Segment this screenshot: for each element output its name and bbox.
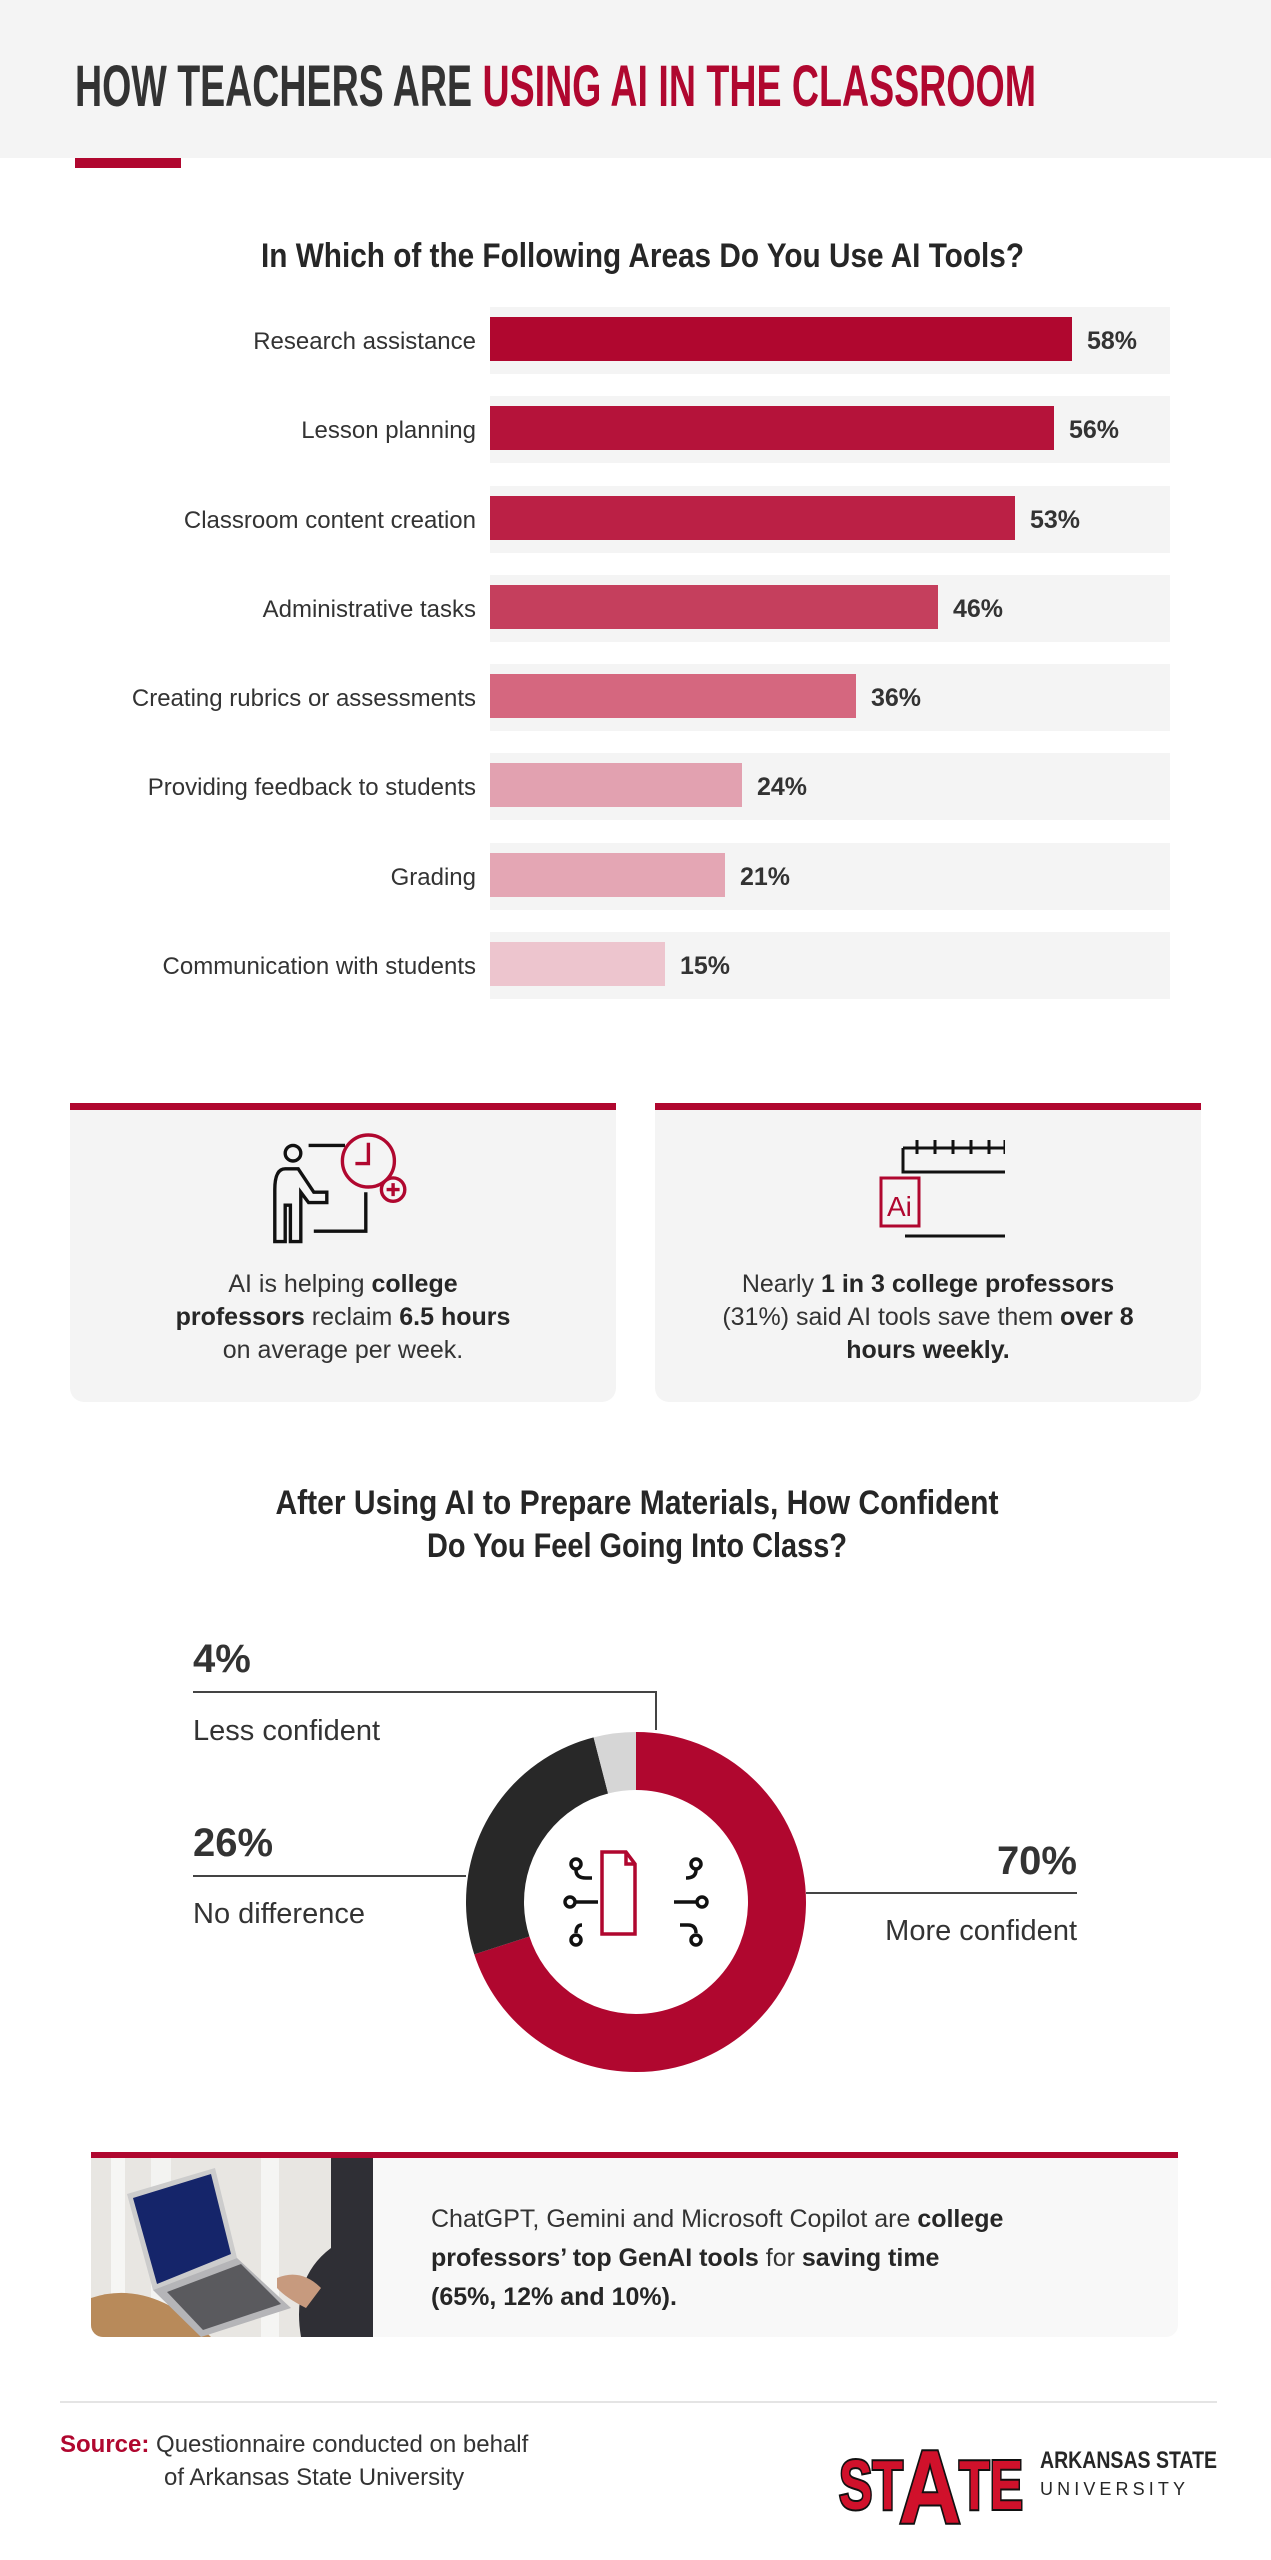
logo — [838, 2430, 1217, 2530]
source: of Arkansas State University — [164, 2464, 464, 2491]
icon: calendar AI — [880, 1140, 1005, 1238]
text — [176, 1270, 510, 1364]
text: professors reclaim 6.5 hours — [176, 1303, 510, 1331]
bar chart: Administrative tasks — [263, 596, 476, 623]
text: hours weekly. — [846, 1336, 1010, 1364]
bar chart: Creating rubrics or assessments — [132, 685, 476, 712]
text: on average per week. — [223, 1336, 463, 1364]
icon: calendar AI: Ai — [887, 1191, 912, 1222]
labels: 4% — [193, 1637, 251, 1681]
bar chart: Research assistance — [253, 328, 476, 355]
icon: teacher with clock — [273, 1133, 406, 1244]
icon: document circuit — [565, 1852, 707, 1945]
text — [431, 2205, 1003, 2311]
bar chart: Classroom content creation — [184, 507, 476, 534]
text: ChatGPT, Gemini and Microsoft Copilot are college — [431, 2205, 1003, 2233]
text: (31%) said AI tools save them over 8 — [722, 1303, 1134, 1331]
labels: 26% — [193, 1821, 273, 1865]
source: Source: Questionnaire conducted on behalf — [60, 2431, 528, 2458]
bar chart: 53% — [1030, 506, 1080, 534]
logo: TE — [959, 2446, 1023, 2524]
donut title: Do You Feel Going Into Class? — [427, 1527, 847, 1565]
bar chart: 15% — [680, 952, 730, 980]
bottom card — [91, 2152, 1178, 2337]
bar chart: 46% — [953, 595, 1003, 623]
labels: No difference — [193, 1898, 365, 1930]
text: Nearly 1 in 3 college professors — [742, 1270, 1114, 1298]
bar chart: 56% — [1069, 416, 1119, 444]
logo: UNIVERSITY — [1040, 2479, 1185, 2499]
text — [722, 1270, 1134, 1364]
labels: Less confident — [193, 1715, 380, 1747]
bar chart: 36% — [871, 684, 921, 712]
bar chart: Grading — [391, 864, 476, 891]
source — [60, 2431, 528, 2491]
labels — [193, 1637, 1077, 1947]
labels: 70% — [997, 1839, 1077, 1883]
text: (65%, 12% and 10%). — [431, 2283, 677, 2311]
header band — [0, 0, 1271, 158]
labels: More confident — [885, 1915, 1077, 1947]
bar chart: 58% — [1087, 327, 1137, 355]
leader lines — [193, 1692, 1077, 1893]
bar chart: 24% — [757, 773, 807, 801]
bar chart — [132, 307, 1170, 999]
card: over 8 hours — [655, 1103, 1201, 1402]
logo: ST — [839, 2446, 903, 2524]
bar chart: Lesson planning — [301, 417, 476, 444]
text: professors’ top GenAI tools for saving time — [431, 2244, 939, 2272]
photo: laptop — [91, 2158, 373, 2337]
bar chart: Communication with students — [163, 953, 476, 980]
accent bar — [75, 158, 181, 168]
divider — [60, 2401, 1217, 2403]
bar chart: Providing feedback to students — [148, 774, 476, 801]
card: hours reclaimed — [70, 1103, 616, 1402]
donut title — [276, 1484, 998, 1565]
text: AI is helping college — [228, 1270, 458, 1298]
bar chart: 21% — [740, 863, 790, 891]
donut chart — [193, 1637, 1077, 2072]
